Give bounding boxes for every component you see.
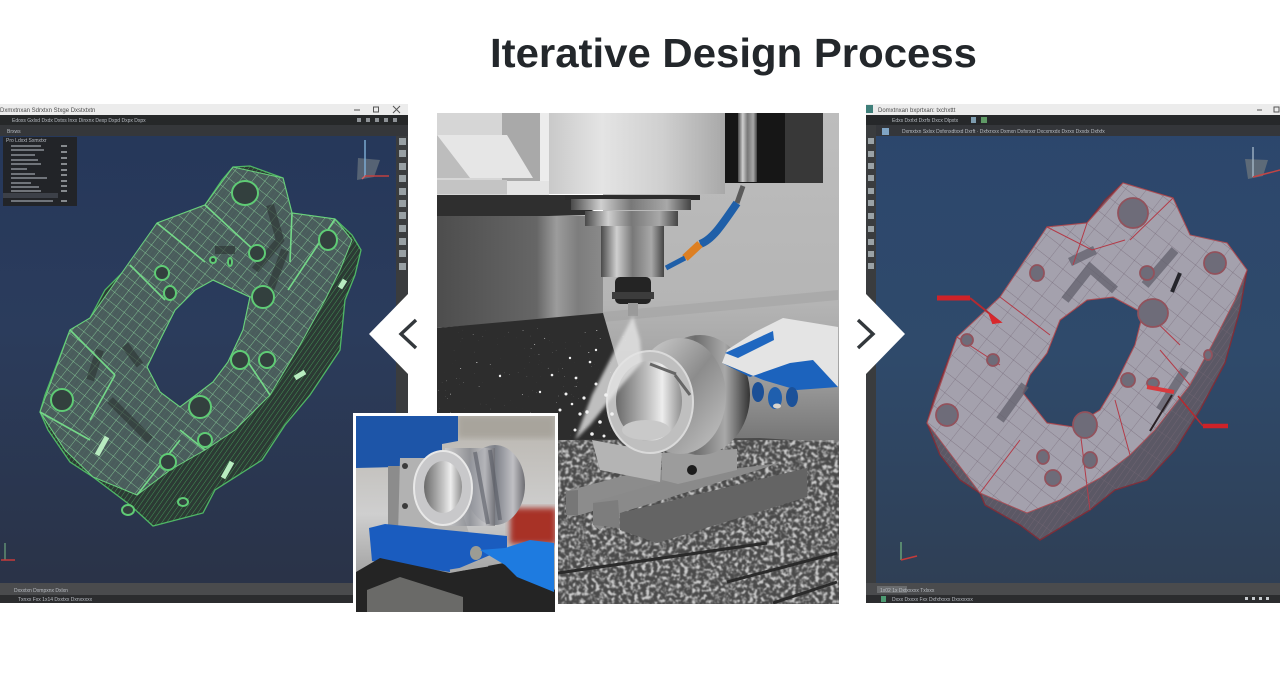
solid bracket model with mesh xyxy=(927,183,1247,540)
inset blurred background xyxy=(356,416,555,590)
bottom status bars: Dxxxtxn Dxmpxnx Dxlxn xyxy=(14,588,68,594)
gloved hand xyxy=(722,318,838,409)
bottom status bars xyxy=(866,583,1280,603)
bottom status bars: 1x02 1x Dxtxxxxx Txlxxx xyxy=(880,588,935,594)
inset back plate xyxy=(398,458,470,536)
inset blue machine head xyxy=(356,416,458,468)
side faces xyxy=(40,166,361,526)
inset blue vise base xyxy=(369,524,507,572)
side rail with tool icons xyxy=(866,125,876,583)
shaded pockets xyxy=(90,205,285,440)
viewport background xyxy=(0,104,408,603)
holes and bosses xyxy=(936,198,1226,486)
red feature edges xyxy=(957,198,1190,510)
wireframe bracket model xyxy=(40,166,361,526)
machined cylindrical workpiece xyxy=(607,335,750,455)
panel: green wireframe CAD window xyxy=(0,104,408,603)
black panel with chrome tube xyxy=(725,113,823,183)
orientation gizmo top right xyxy=(1245,147,1280,179)
menu bar xyxy=(866,115,1280,125)
title bar xyxy=(866,104,1280,115)
menu bar xyxy=(0,115,408,125)
toolbar: Brxws xyxy=(7,129,21,135)
bottom status bars: Txnxx Fxx 1x14 Dxxtxx Dxnxxxxx xyxy=(18,597,93,603)
red annotation arrow lower right xyxy=(1147,387,1228,426)
title bar: Dxmxtnxan Sdrxtxn Stxge Dxstxtxtn xyxy=(0,108,95,114)
toolbar: Dxmxtxn Sxlxx Dxfxnxdtxxd Dxrft · Dxfxrxxx Dxmxn Dxfxrxxr Dxcxmxdx Dxrxx Dxxdx Dxfxfx xyxy=(902,129,1105,135)
inset cylindrical part xyxy=(414,445,525,526)
panel: red-marked analysis CAD window xyxy=(353,104,1280,614)
orientation gizmo top right xyxy=(357,140,389,180)
toolbar xyxy=(0,125,408,136)
inset knob xyxy=(470,546,482,560)
side faces xyxy=(927,183,1247,540)
upper left housing xyxy=(437,113,549,195)
workpiece mount block xyxy=(592,440,737,484)
arrow: forward to next step xyxy=(838,294,905,374)
dark rail band xyxy=(437,195,594,216)
spindle white cylinder xyxy=(549,113,725,194)
feature edges xyxy=(40,205,335,495)
axis triad bottom left xyxy=(901,542,917,560)
title bar xyxy=(0,104,408,115)
bottom status bars xyxy=(0,583,408,603)
layer list panel: Pro Ldxxt Sxmxtxr xyxy=(6,138,47,144)
panel: inset photo of fixture xyxy=(353,413,558,614)
top face with mesh xyxy=(40,167,352,495)
viewport background xyxy=(866,104,1280,603)
top face with mesh xyxy=(927,183,1247,513)
arrow: back to previous step xyxy=(369,294,438,374)
inset dark vise below xyxy=(356,558,555,612)
machine table bars xyxy=(566,463,807,543)
toolbar xyxy=(876,125,1280,136)
inset blue gloved hand xyxy=(480,540,554,592)
menu bar: Edoxs Gxlxd Dxdx Dxtxs Inxx Dinxnx Dexp Dxpd Dxpx Dxpx xyxy=(12,118,146,124)
wall background xyxy=(603,113,839,453)
axis triad bottom left xyxy=(1,543,15,560)
metal chips floor xyxy=(558,438,839,604)
coolant spray xyxy=(499,316,642,440)
dark bench with chips xyxy=(437,313,624,440)
coolant hose xyxy=(666,186,743,268)
layer list panel xyxy=(3,137,77,206)
bottom status bars: Dxxx Dxxxx Fxx Dxfxfxxxx Dxxxxxxx xyxy=(892,597,973,603)
side rail with tool icons xyxy=(396,136,408,583)
inset grey column xyxy=(388,466,400,526)
left wall xyxy=(437,216,603,328)
holes and bosses xyxy=(51,181,337,515)
title: Iterative Design Process xyxy=(490,30,977,76)
spindle tool assembly xyxy=(565,195,700,316)
shaded pockets xyxy=(1000,250,1185,420)
panel: CNC machining photo xyxy=(437,113,839,604)
white inset frame xyxy=(353,413,558,614)
red annotation arrow upper left xyxy=(937,298,1000,323)
title bar: Domxtnxan bxprtxan: txchxttt xyxy=(878,108,956,114)
menu bar: Edxs Dxrlxt Dxrfx Dxcx Dlpxtx xyxy=(892,118,959,124)
